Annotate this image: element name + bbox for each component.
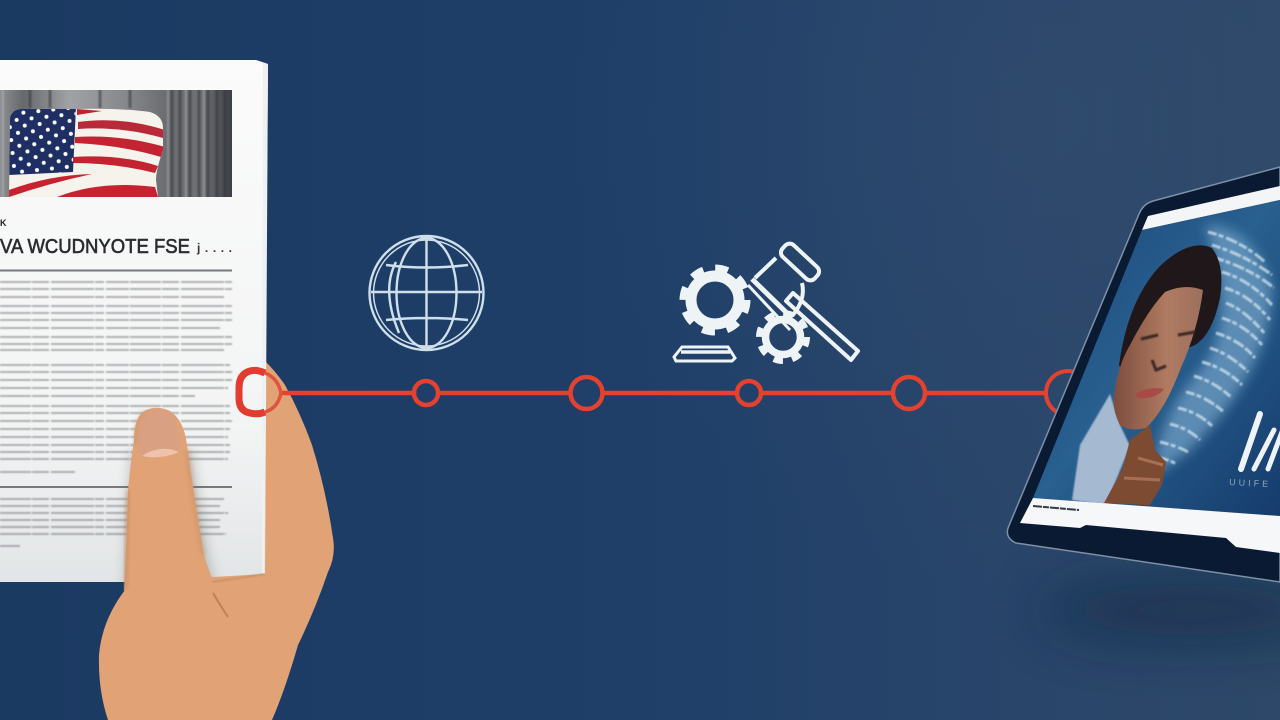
timeline node 2 bbox=[570, 377, 602, 409]
mouth bbox=[1135, 388, 1164, 398]
gavel base bbox=[674, 347, 735, 361]
raised hand bbox=[1104, 425, 1166, 505]
icon: gears and gavel bbox=[674, 241, 858, 361]
document headline: VA WCUDNYOTE FSE bbox=[0, 236, 190, 258]
thumbnail bbox=[137, 409, 180, 458]
tablet bbox=[1007, 167, 1280, 582]
timeline node 4 bbox=[893, 377, 925, 409]
small gear bbox=[759, 313, 807, 361]
tablet frame bbox=[1007, 167, 1280, 582]
timeline node 3 bbox=[737, 381, 761, 405]
document body text bbox=[0, 282, 232, 546]
tablet bottom bar bbox=[1020, 498, 1280, 553]
photo band with flag bbox=[0, 88, 232, 200]
fingerprint glow bbox=[1155, 225, 1272, 475]
hand: palm and rear finger bbox=[99, 362, 334, 720]
tablet caption bbox=[1033, 506, 1079, 510]
logo strokes bbox=[1241, 414, 1280, 469]
icon: globe bbox=[370, 236, 484, 350]
gavel head bbox=[748, 241, 822, 330]
gavel handle bbox=[786, 293, 858, 360]
timeline end node bbox=[1046, 371, 1090, 415]
shirt bbox=[1072, 394, 1130, 505]
document page bbox=[0, 60, 268, 582]
hand: thumb over document bbox=[120, 408, 265, 618]
face bbox=[1114, 287, 1203, 429]
timeline start node bbox=[239, 370, 281, 414]
tablet top bar bbox=[1142, 186, 1280, 230]
US flag bbox=[9, 108, 163, 197]
logo caption: UUIFE bbox=[1229, 477, 1271, 489]
timeline line bbox=[280, 391, 1046, 395]
fingerprint pattern bbox=[1160, 232, 1274, 464]
large gear bbox=[683, 268, 747, 332]
document headline trailing: j.... bbox=[196, 241, 232, 255]
document small tag: K bbox=[0, 218, 7, 228]
tablet screen bbox=[1020, 190, 1280, 520]
timeline node 1 bbox=[414, 381, 438, 405]
hair bbox=[1119, 245, 1221, 375]
eyes and nose bbox=[1141, 332, 1195, 370]
